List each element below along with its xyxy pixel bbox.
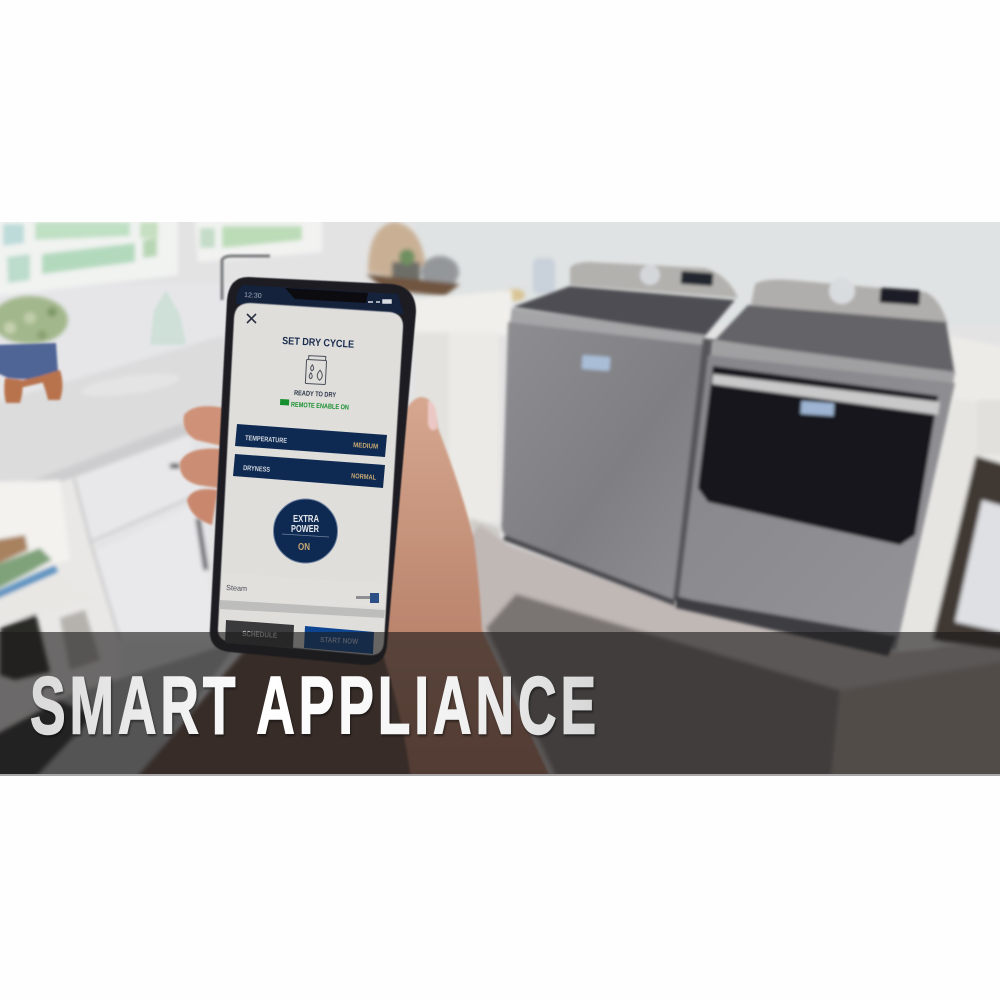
infographic canvas <box>0 222 1000 776</box>
title: smart appliance: SMART APPLIANCE <box>31 662 601 754</box>
temperature row <box>235 424 387 457</box>
back shelf items <box>366 222 555 301</box>
status bar <box>236 285 404 314</box>
steam row <box>219 584 385 618</box>
dryness row <box>233 454 385 488</box>
schedule button <box>225 620 294 648</box>
status icons <box>368 300 391 303</box>
hand: fingers, palm and wrist <box>180 397 556 790</box>
phone notch <box>285 288 368 303</box>
phone screen <box>218 303 403 655</box>
band bottom edge <box>0 774 1000 776</box>
ready status: READY TO DRY <box>294 390 336 399</box>
screen heading: SET DRY CYCLE <box>282 335 354 351</box>
phone body <box>210 277 416 665</box>
floor <box>0 525 1000 790</box>
dark title band <box>0 632 1000 774</box>
close icon <box>247 314 256 323</box>
left base cabinets <box>60 434 210 632</box>
title: smart appliance <box>30 660 601 754</box>
start now button <box>304 626 374 654</box>
washer <box>501 262 738 606</box>
title: smart appliance: SMART APPLIANCE <box>30 660 600 752</box>
smartphone <box>210 277 416 665</box>
open shelf items lower left <box>0 480 100 680</box>
window left <box>0 222 322 294</box>
right wall, cabinet and hamper <box>930 340 1000 651</box>
dryer <box>676 278 955 656</box>
remote enable status <box>280 399 349 410</box>
left countertop <box>28 338 224 482</box>
extra power button <box>274 499 338 563</box>
back wall <box>0 222 1000 696</box>
remote enable status: REMOTE ENABLE ON <box>291 402 349 412</box>
back counter and cabinets <box>405 290 512 540</box>
start now button: START NOW <box>320 635 359 646</box>
faucet and bottle <box>150 256 270 345</box>
extra power button: POWER <box>291 524 320 535</box>
extra power button: EXTRA <box>293 514 319 525</box>
dryness row: NORMAL <box>351 473 377 482</box>
dryer icon <box>305 355 327 385</box>
temperature row: MEDIUM <box>353 442 378 451</box>
schedule button: SCHEDULE <box>242 629 277 640</box>
potted plant <box>0 296 68 403</box>
extra power button: ON <box>298 542 310 553</box>
smartphone: 12:30 <box>244 292 262 300</box>
steam row: Steam <box>226 583 247 593</box>
photo: laundry room scene <box>0 215 1000 790</box>
dryness row: DRYNESS <box>243 465 271 474</box>
temperature row: TEMPERATURE <box>245 435 288 445</box>
